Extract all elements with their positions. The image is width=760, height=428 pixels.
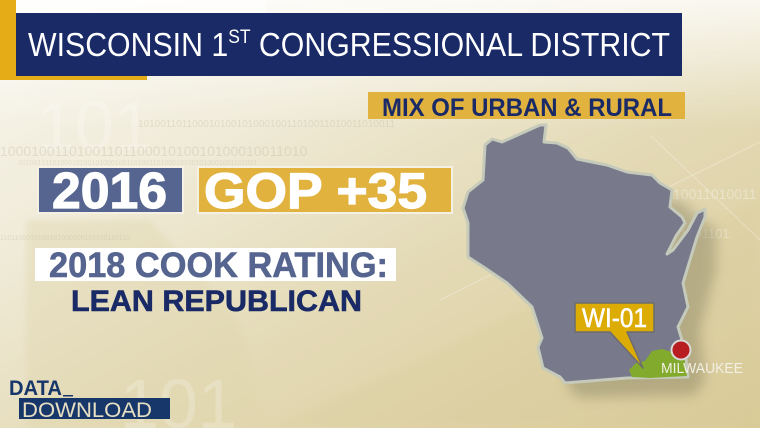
logo: data download: DATA bbox=[9, 377, 62, 400]
badge: 2016: 2016 bbox=[52, 162, 167, 219]
rating label: 2018 COOK RATING: bbox=[49, 246, 388, 285]
callout: WI-01 bbox=[575, 303, 654, 368]
title banner bbox=[0, 0, 682, 80]
title text: CONGRESSIONAL DISTRICT bbox=[251, 26, 670, 63]
title text: WISCONSIN 1 bbox=[28, 26, 246, 63]
background: 10011010011 bbox=[673, 186, 757, 202]
map: Wisconsin bbox=[463, 125, 743, 398]
background: 10100110110001010010100010011010011010011010011 bbox=[138, 119, 395, 130]
state shape bbox=[463, 125, 705, 383]
tag: mix of urban and rural: MIX OF URBAN & RURAL bbox=[382, 94, 672, 122]
label: Milwaukee: MILWAUKEE bbox=[661, 360, 743, 377]
logo: data download: DOWNLOAD bbox=[22, 399, 152, 422]
region: WI-01 district bbox=[629, 349, 687, 378]
logo: data download bbox=[9, 377, 170, 422]
callout: WI-01: WI-01 bbox=[582, 303, 647, 333]
title text: ST bbox=[228, 27, 251, 48]
background: 101 bbox=[36, 87, 153, 165]
badge: GOP +35: GOP +35 bbox=[204, 163, 427, 219]
background: 10100101101000101001010001001101001101000101001010001001101001 bbox=[18, 160, 257, 167]
background: 1101100010100101000100110100110110 bbox=[0, 235, 130, 242]
marker: Milwaukee bbox=[672, 340, 690, 360]
rating value: LEAN REPUBLICAN bbox=[71, 285, 362, 318]
background: 1001101 bbox=[680, 226, 730, 241]
cook rating bbox=[35, 246, 396, 318]
background: 1000100110100110110001010010100010011010 bbox=[0, 143, 308, 159]
